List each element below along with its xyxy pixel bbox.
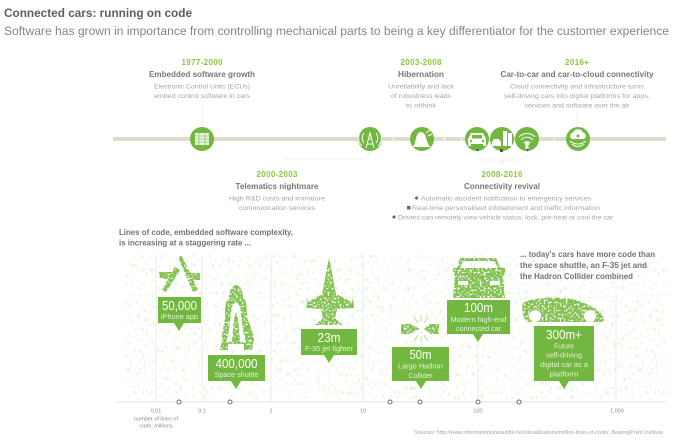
axis labels: 10 [360,408,366,414]
milestone 2016+: Cloud connectivity and infrastructure turns [510,84,645,90]
milestone 1977-2000: 1977-2000 [182,58,223,67]
scale chart [116,255,666,430]
milestone 1977-2000: Electronic Control Units (ECUs) [154,84,250,90]
callout: 300m+: platform [550,372,579,378]
axis labels [134,408,624,430]
code heading left: Lines of code, embedded software complexity, [119,227,293,237]
icon: cloud signal [566,127,590,151]
axis labels: 0.01 [151,408,161,414]
icon: wifi person [515,127,539,152]
callout: 50m: Collider [408,373,433,380]
callout: 50,000: iPhone app [161,314,198,321]
callout: 300m+: 300m+ [546,328,582,342]
milestone 2016+: services and software over the air [524,102,630,110]
callout: 400,000 [208,355,265,389]
milestone 2003-2008: of robustness leads [391,93,452,100]
icon: space shuttle [220,285,254,350]
callout: 23m: F-35 jet fighter [305,346,354,353]
callout: 300m+: self-driving [546,352,582,360]
code heading right: the space shuttle, an F-35 jet and [520,260,647,270]
callout: 50m [392,347,449,389]
milestone 1977-2000: Embedded software growth [149,70,255,79]
icon: car and buildings [490,127,514,152]
callout: 50m: Large Hadron [398,364,443,370]
callout: 50,000 [158,297,201,331]
axis labels: 1,000 [610,408,624,414]
milestone 2016+: self-driving cars into digital platforms for apps, [504,93,650,100]
axis labels: 1 [269,408,273,414]
callout: 100m: 100m [464,301,493,315]
milestone 2000-2003 [229,170,325,212]
code heading right: the Hadron Collider combined [520,271,633,281]
callout: 300m+ [534,326,594,389]
milestone 2016+: 2016+ [565,58,589,67]
speckled background [125,255,665,400]
milestone 2008-2016: 2008-2016 [482,170,523,179]
subtitle: Software has grown in importance from controlling mechanical parts to being a key differentiator for the customer experience [4,24,669,38]
code heading right [520,249,655,281]
bullet marker [500,149,503,152]
callout: 50m: 50m [410,348,432,362]
callout: 50,000: 50,000 [162,299,197,313]
milestone 2016+: Car-to-car and car-to-cloud connectivity [500,70,654,79]
callout: 23m [301,329,357,363]
callout: 400,000: 400,000 [216,357,258,371]
icon: app logo [159,256,200,292]
milestone 2008-2016: Automatic accident notification to emergency services [421,196,592,202]
callout: 300m+: Future [554,344,574,350]
code heading right: ... today's cars have more code than [520,249,655,259]
callout: 300m+: digital car as a [540,362,588,369]
callout: 23m: 23m [318,331,340,345]
icon: particle collider [401,315,439,343]
callout: 100m: connected car [456,326,502,333]
callout: 400,000: Space shuttle [214,372,259,379]
milestone 2000-2003: communication services [239,205,316,212]
bullet marker [476,148,479,152]
axis labels: number of lines of [134,416,178,422]
icon: control unit chip [190,127,214,151]
milestone 2003-2008: Hibernation [398,70,444,79]
milestone 2000-2003: 2000-2003 [256,170,298,179]
milestone 2008-2016 [392,170,614,222]
milestone 2003-2008: 2003-2008 [400,58,442,67]
icon: jet fighter [306,258,354,325]
callout: 100m [447,300,510,342]
milestone 2000-2003: Telematics nightmare [236,182,319,191]
white wheels [529,310,596,322]
axis labels: 100 [473,408,483,414]
timeline [113,104,666,165]
milestone 1977-2000 [149,58,255,100]
code heading left: is increasing at a staggering rate ... [119,238,251,248]
timeline bar [113,137,666,141]
milestone 1977-2000: embed control software in cars [154,93,251,100]
milestone 2008-2016: Real-time personalised infotainment and traffic information [412,205,600,212]
axis labels: 0.1 [198,408,206,414]
milestone 2008-2016: Drivers can remotely view vehicle status, lock, pre-heat or cool the car [398,214,614,222]
milestone 2003-2008: Unreliability and lack [388,84,455,90]
axis [116,401,666,403]
code heading left [119,227,293,248]
icon: antenna tower [358,127,382,151]
milestone 2003-2008: to rethink [406,102,437,110]
milestone 2003-2008 [388,58,455,110]
icon: car front [465,127,489,152]
icon: bell [410,127,434,151]
bullet marker [526,148,529,152]
source note: Sources: http://www.informationisbeautiful.net/visualizations/million-lines-of-code/, BearingPoint Institute [414,430,663,436]
axis labels: code, millions [139,424,173,430]
callout: 100m: Modern high-end [450,317,507,324]
icon: self-driving car side [522,298,604,322]
milestone 2016+ [500,58,654,110]
milestone 2000-2003: High R&D costs and immature [229,196,325,202]
title: Connected cars: running on code [4,6,192,20]
icon: modern car front [453,258,505,298]
milestone 2008-2016: Connectivity revival [464,182,540,191]
